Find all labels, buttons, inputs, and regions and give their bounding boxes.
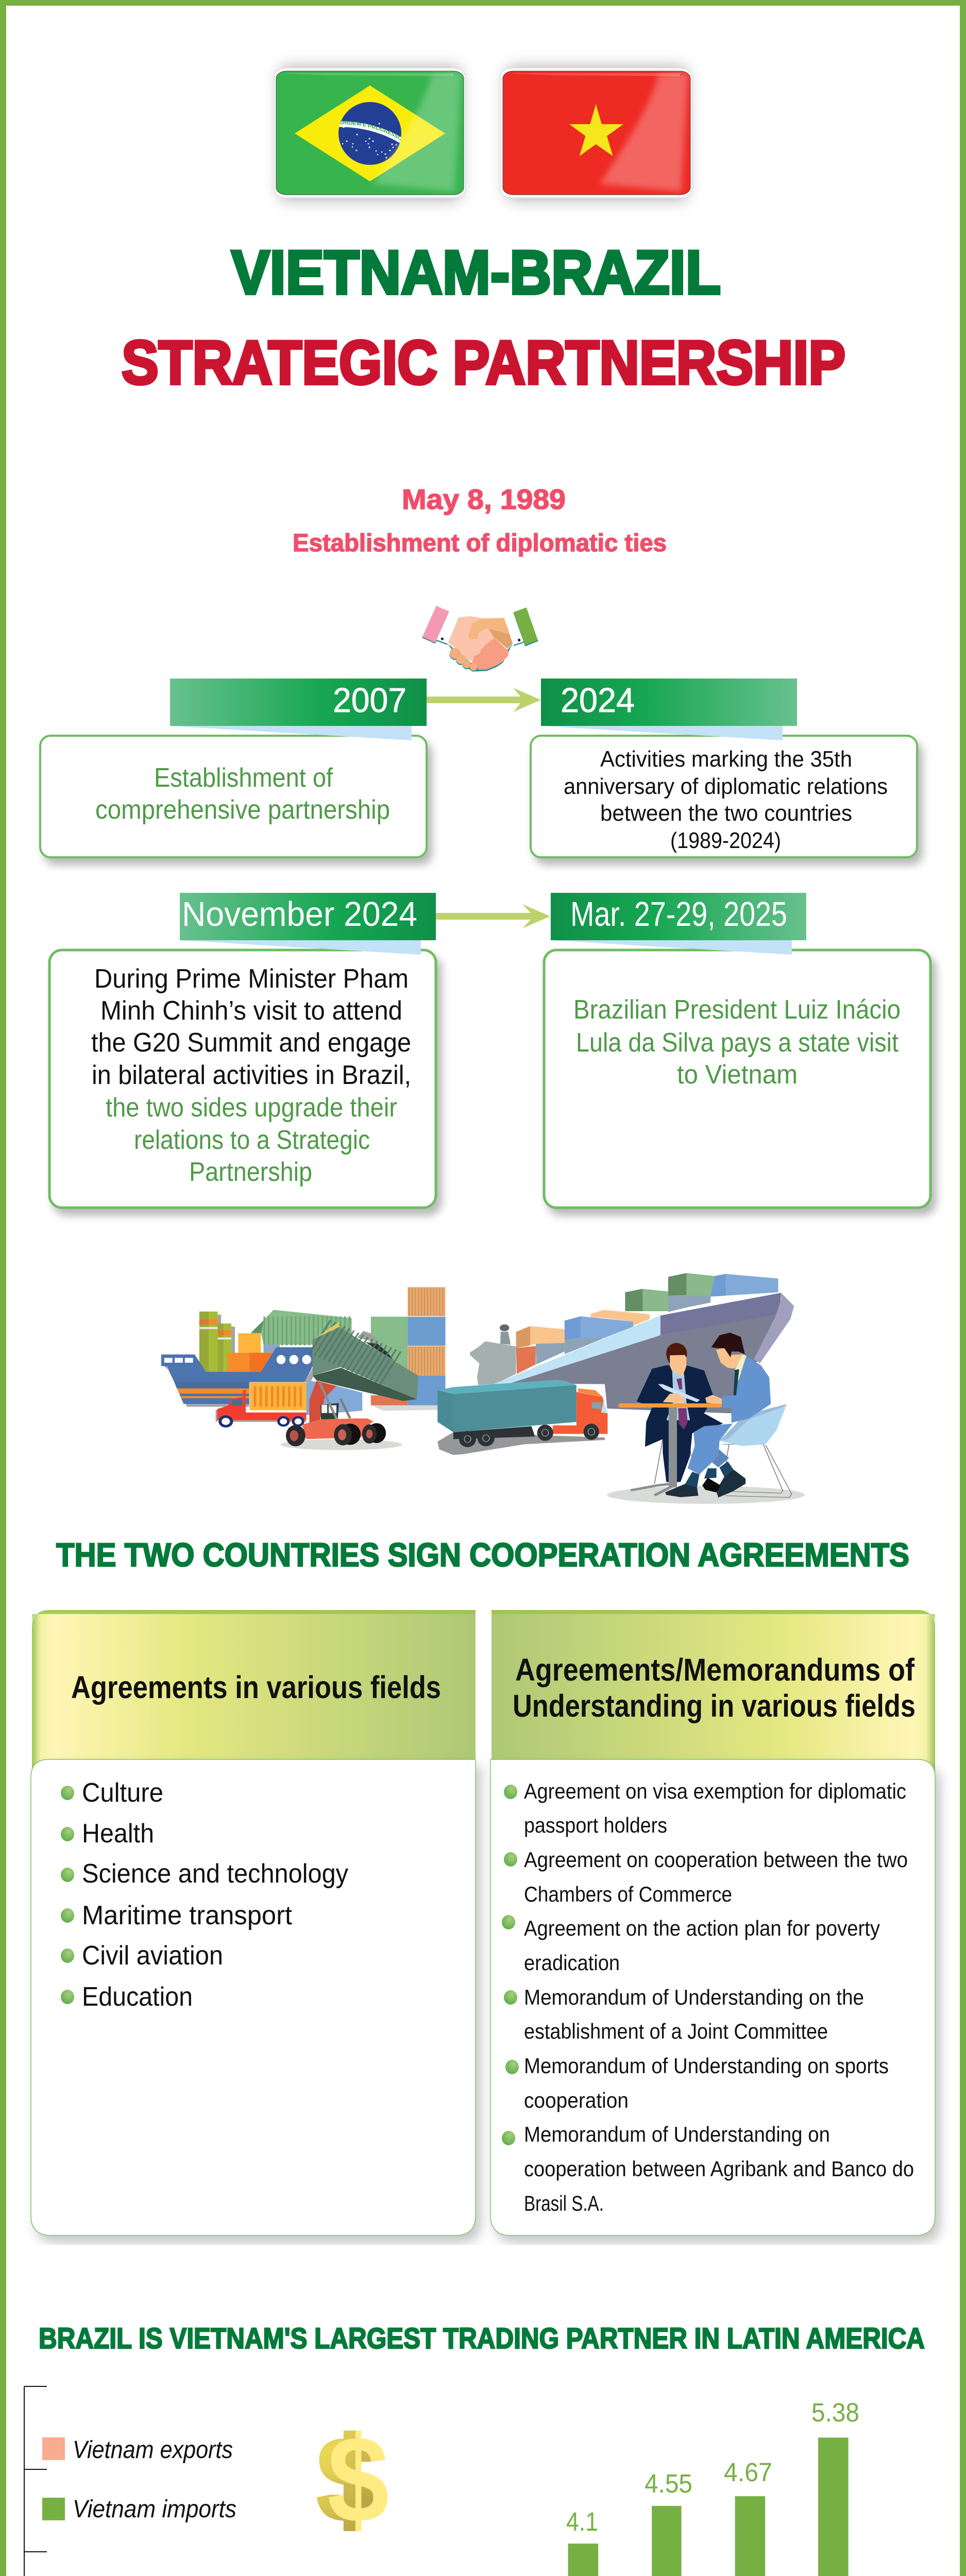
icon: gold dollar sign: $: [317, 2411, 379, 2548]
icon: gold dollar sign: $: [315, 2411, 377, 2548]
list of agreements: [502, 1779, 914, 2215]
November 2024 banner: [180, 893, 436, 955]
list of fields: Science and technology: [82, 1859, 348, 1889]
March 2025 banner: Mar. 27-29, 2025: [570, 895, 787, 934]
2024 year banner: [541, 679, 797, 740]
November 2024 description box: in bilateral activities in Brazil,: [92, 1060, 411, 1090]
2024 description box: [531, 736, 917, 857]
truck: [437, 1380, 607, 1455]
list of agreements: passport holders: [524, 1813, 667, 1837]
icon: gold dollar sign: $: [324, 2411, 385, 2548]
November 2024 description box: the two sides upgrade their: [106, 1093, 397, 1123]
ship and containers: [470, 1273, 794, 1413]
panel: 2024: [531, 679, 917, 857]
bar chart: Vietnam exports and imports with Brazil: [24, 2386, 943, 2576]
icon: gold dollar sign: $: [327, 2411, 389, 2548]
November 2024 description box: relations to a Strategic: [134, 1125, 370, 1155]
list of agreements: Brasil S.A.: [524, 2191, 604, 2215]
import value labels: 4.55: [645, 2469, 692, 2498]
list of fields: Maritime transport: [82, 1901, 293, 1930]
illustration: port cargo and forklift: [161, 1287, 469, 1450]
panel: agreements in various fields: [31, 1610, 476, 2235]
list of agreements: Agreement on the action plan for poverty: [524, 1916, 880, 1940]
November 2024 description box: Minh Chinh’s visit to attend: [100, 996, 402, 1026]
list of agreements: Memorandum of Understanding on: [524, 2122, 830, 2146]
list of agreements: Memorandum of Understanding on sports: [524, 2054, 889, 2078]
legend: Vietnam imports: [73, 2496, 236, 2523]
panel: March 2025: [544, 893, 930, 1208]
March 2025 description box: to Vietnam: [677, 1060, 798, 1090]
icon: Vietnam flag: [500, 66, 692, 201]
icon: gold dollar sign: $: [321, 2411, 383, 2548]
title: STRATEGIC PARTNERSHIP: [122, 328, 845, 397]
panel: agreements and memorandums of understanding: [490, 1610, 935, 2235]
November 2024 description box: Partnership: [189, 1157, 312, 1187]
panel body: [31, 1759, 476, 2235]
import value labels: 4.67: [724, 2458, 772, 2487]
2024 year banner: 2024: [561, 681, 635, 720]
import value labels: [66, 2398, 859, 2576]
chart axes: [24, 2386, 943, 2576]
list of fields: [61, 1778, 348, 2012]
November 2024 banner: November 2024: [182, 895, 417, 934]
list of agreements: cooperation: [524, 2088, 629, 2112]
legend: Vietnam exports: [73, 2436, 233, 2464]
March 2025 description box: Lula da Silva pays a state visit: [576, 1028, 899, 1058]
list of agreements: establishment of a Joint Committee: [524, 2019, 828, 2043]
2007 year banner: [170, 679, 427, 740]
panel: November 2024: [49, 893, 436, 1208]
2007 description box: Establishment of: [154, 763, 333, 793]
legend: [42, 2436, 236, 2523]
2024 description box: between the two countries: [600, 801, 852, 826]
2007 description box: comprehensive partnership: [95, 795, 390, 825]
section heading: cooperation agreements: THE TWO COUNTRIES SIGN COOPERATION AGREEMENTS: [56, 1536, 909, 1573]
date heading: Establishment of diplomatic ties: [293, 530, 667, 557]
list of agreements: Agreement on visa exemption for diplomatic: [524, 1779, 906, 1803]
March 2025 banner: [551, 893, 806, 955]
arrow: 2007 to 2024: [427, 688, 541, 712]
panel header: Agreements/Memorandums of: [515, 1652, 915, 1687]
panel: 2007: [40, 679, 427, 857]
panel header: [32, 1610, 476, 1777]
icon: Brazil flag: ORDEM E PROGRESSO: [340, 121, 401, 140]
November 2024 description box: the G20 Summit and engage: [91, 1028, 411, 1058]
list of agreements: Agreement on cooperation between the two: [524, 1848, 908, 1872]
list of agreements: Memorandum of Understanding on the: [524, 1985, 864, 2009]
date heading: May 8, 1989: [402, 483, 566, 515]
list of fields: Health: [82, 1819, 154, 1849]
2007 year banner: 2007: [333, 681, 406, 720]
import value labels: 5.38: [811, 2398, 859, 2427]
list of fields: Culture: [82, 1778, 163, 1808]
March 2025 description box: Brazilian President Luiz Inácio: [573, 995, 901, 1025]
2024 description box: Activities marking the 35th: [600, 747, 852, 772]
list of fields: Education: [82, 1982, 193, 2012]
list of agreements: cooperation between Agribank and Banco do: [524, 2157, 914, 2181]
2024 description box: (1989-2024): [670, 828, 781, 853]
panel header: Agreements in various fields: [71, 1670, 441, 1705]
list of fields: Civil aviation: [82, 1941, 223, 1971]
illustration: cargo ship, truck and two businessmen: [437, 1273, 805, 1504]
November 2024 description box: [49, 950, 436, 1208]
2007 description box: [40, 736, 427, 857]
import bars: [68, 2437, 932, 2576]
November 2024 description box: During Prime Minister Pham: [94, 964, 409, 994]
panel header: [492, 1610, 935, 1777]
icon: Brazil flag: [270, 58, 470, 209]
icon: handshake: [422, 606, 538, 672]
title: VIETNAM-BRAZIL: [231, 238, 721, 307]
March 2025 description box: [544, 950, 930, 1208]
list of agreements: eradication: [524, 1951, 620, 1975]
title: [122, 238, 845, 397]
2024 description box: anniversary of diplomatic relations: [564, 774, 888, 799]
date heading: [293, 483, 667, 557]
businessmen at table: [607, 1333, 805, 1504]
import value labels: 4.1: [566, 2507, 598, 2536]
icon: gold dollar sign: $: [319, 2411, 381, 2548]
arrow: November 2024 to March 2025: [436, 904, 550, 928]
list of agreements: Chambers of Commerce: [524, 1882, 732, 1906]
panel body: [490, 1759, 935, 2235]
